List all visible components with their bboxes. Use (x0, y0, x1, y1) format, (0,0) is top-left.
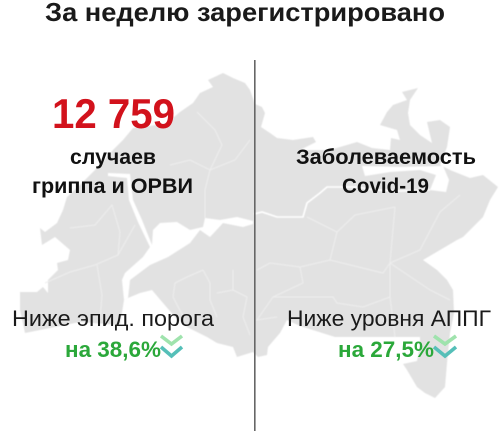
thin river channel (254, 187, 430, 217)
left comparison: below epidemic threshold (12, 306, 215, 362)
icon: double down chevron (434, 336, 456, 356)
Volga and Kama rivers (13, 166, 449, 300)
case label: случаев (70, 146, 156, 169)
map of the region (13, 73, 498, 398)
icon: double down chevron (161, 336, 182, 356)
right panel: Covid-19 heading (296, 146, 476, 198)
right panel: Covid-19 heading: Covid-19 (342, 175, 429, 198)
case count: 12 759 (52, 90, 175, 137)
right comparison: below APPG level (287, 306, 491, 362)
APPG label: Ниже уровня АППГ (287, 306, 491, 331)
threshold label: Ниже эпид. порога (12, 306, 215, 331)
case label (32, 146, 193, 198)
vertical divider (254, 60, 256, 431)
APPG percentage: на 27,5% (338, 337, 434, 362)
right panel: Covid-19 heading: Заболеваемость (296, 146, 476, 169)
threshold percentage: на 38,6% (65, 337, 161, 362)
district borders (45, 112, 460, 337)
case label: гриппа и ОРВИ (32, 175, 193, 198)
left panel: flu and ARVI cases (32, 90, 193, 198)
